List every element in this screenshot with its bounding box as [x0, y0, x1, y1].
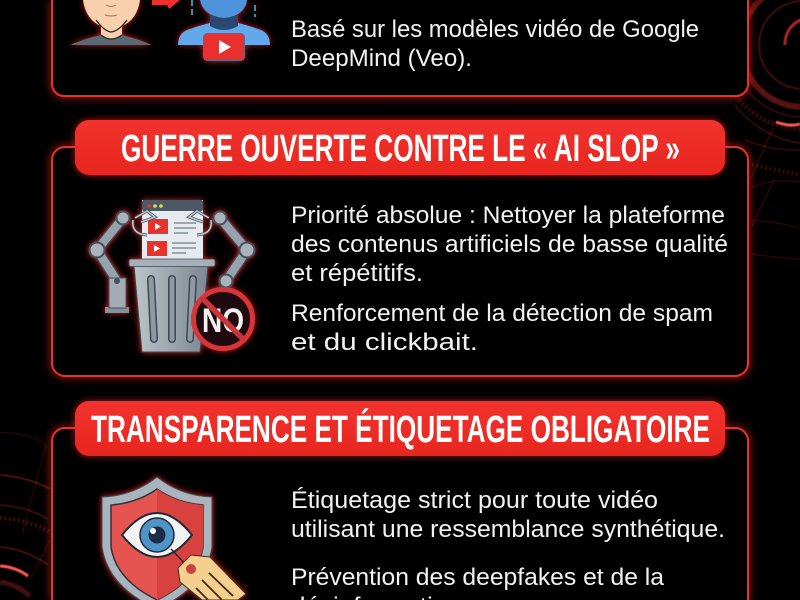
icon: no sign: NO — [202, 302, 244, 340]
text block: intro: Basé sur les modèles vidéo de Google — [291, 16, 699, 43]
text block: slop priority: des contenus artificiels de basse qualité — [291, 231, 728, 258]
icon: shield with eye and tag — [102, 477, 246, 600]
icon: robot arms and trash — [90, 200, 254, 352]
robot arm right — [220, 218, 247, 281]
icon: no sign — [194, 290, 252, 348]
panel: AI slop — [52, 120, 748, 376]
bin — [134, 266, 208, 352]
text block: intro: DeepMind (Veo). — [291, 45, 472, 72]
text block: deepfakes: Prévention des deepfakes et de la — [291, 564, 665, 591]
document — [142, 200, 203, 260]
heading: AI slop — [75, 120, 725, 175]
panel: intro (cropped) — [52, 0, 748, 96]
panel: transparency — [52, 401, 748, 600]
decoration: top right radar rings — [719, 0, 800, 259]
text block: slop detection: Renforcement de la détection de spam — [291, 300, 713, 327]
heading: transparency — [75, 401, 725, 456]
text block: labelling: Étiquetage strict pour toute vidéo — [291, 487, 658, 514]
robot arm left — [97, 218, 123, 281]
icon: play button — [204, 34, 244, 60]
icon: person — [70, 0, 152, 45]
icon: arrow — [152, 0, 180, 9]
text block: slop priority: Priorité absolue : Nettoyer la plateforme — [291, 202, 725, 229]
icon: tag — [178, 555, 246, 600]
text block: labelling: utilisant une ressemblance synthétique. — [291, 516, 725, 543]
text block: slop detection: et du clickbait. — [291, 329, 478, 356]
text block: slop priority: et répétitifs. — [291, 260, 423, 287]
icon: AI avatar with play button — [178, 0, 270, 60]
decoration: bottom left radar arcs — [0, 433, 50, 596]
